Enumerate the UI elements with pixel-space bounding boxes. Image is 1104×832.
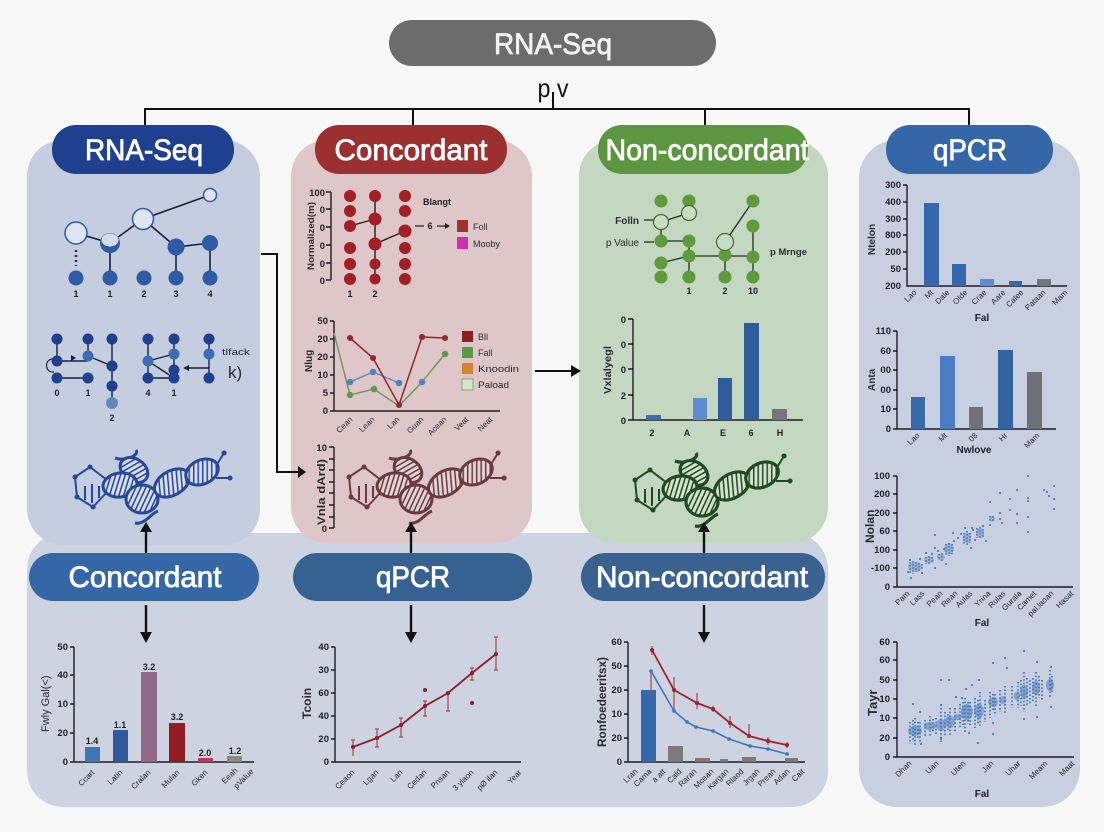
dot plot: normalized: 6	[427, 221, 433, 231]
heading: Non-concordant	[598, 125, 809, 174]
chart axis behind helix: 10	[316, 443, 327, 454]
network diagram: upper: 1	[73, 289, 79, 299]
bar chart: green panel: 0	[621, 365, 626, 376]
heading: RNA-Seq: RNA-Seq	[85, 134, 203, 167]
bar chart: concordant	[40, 642, 256, 791]
panel: Non-concordant	[579, 125, 828, 543]
line chart: qPCR: Cedan	[405, 768, 428, 791]
dot plot: normalized: Blangt	[423, 197, 451, 207]
line chart: qPCR: Lgan	[361, 768, 380, 787]
scatter plot: upper: 100	[874, 471, 890, 482]
title	[389, 20, 716, 66]
scatter plot: upper: pal.laoan	[1026, 589, 1055, 618]
network diagram: green: p Mrnge	[770, 247, 807, 258]
bar chart: concordant: Latin	[106, 768, 124, 787]
bar chart: green panel: 0	[621, 416, 626, 427]
combo chart: non-concordant	[595, 637, 807, 792]
icon: DNA helix green	[635, 453, 790, 526]
scatter plot: upper: Hasat	[1054, 589, 1076, 610]
heading: Concordant: Concordant	[68, 561, 222, 594]
line chart: multi-series: 50	[317, 316, 328, 327]
icon: DNA helix blue	[75, 450, 230, 523]
line chart: qPCR: 40	[318, 711, 329, 722]
line chart: qPCR: Pnsan	[429, 768, 451, 790]
bar chart: concordant: 1.1	[114, 720, 126, 730]
scatter plot: lower: Uhar	[1004, 759, 1023, 778]
bar chart: qPCR top: Olde	[951, 288, 970, 306]
combo chart: non-concordant: 10	[611, 709, 622, 720]
scatter plot: lower: Uan	[924, 759, 940, 776]
line chart: multi-series: 10	[317, 370, 328, 381]
heading: Concordant	[315, 125, 507, 174]
icon: DNA helix brown	[349, 450, 504, 523]
bar chart: qPCR top: 400	[885, 197, 901, 208]
scatter plot: upper: 100	[874, 545, 890, 556]
combo chart: non-concordant: Mcean	[692, 767, 715, 790]
bar chart: green panel	[602, 315, 803, 438]
scatter plot: lower: Meam	[1027, 759, 1050, 781]
bar chart: green panel: 6	[748, 428, 754, 438]
bar chart: qPCR second: Hr	[997, 431, 1010, 443]
dot plot: normalized: 0	[320, 205, 325, 216]
combo chart: non-concordant: Raran	[677, 767, 698, 789]
line chart: qPCR: 40	[318, 642, 329, 653]
network diagram: upper: 1	[107, 289, 113, 299]
bar chart: qPCR second: Anta	[867, 368, 878, 391]
panel: bottom validation band	[27, 533, 828, 807]
bar chart: qPCR second: Lao	[906, 431, 922, 447]
line chart: multi-series: Bll	[478, 332, 488, 342]
combo chart: non-concordant: 20	[611, 733, 622, 744]
bar chart: qPCR top: Fal	[975, 313, 989, 324]
combo chart: non-concordant: Cait	[790, 767, 807, 783]
bar chart: concordant: 50	[57, 642, 68, 653]
heading: qPCR: qPCR	[933, 134, 1007, 167]
bar chart: concordant: Fwly Gal(<)	[40, 675, 52, 732]
chart axis behind helix	[316, 443, 334, 535]
combo chart: non-concordant: Prean	[756, 767, 777, 789]
bar chart: green panel: 0	[621, 340, 626, 351]
scatter plot: upper: Rulas	[987, 589, 1007, 610]
scatter plot: upper: -100	[871, 563, 890, 574]
network diagram: green: 2	[722, 286, 728, 296]
dot plot: normalized: 2	[372, 289, 378, 299]
combo chart: non-concordant: Ronfoedeeritsx)	[595, 657, 609, 747]
line chart: multi-series: Guan	[405, 415, 425, 435]
combo chart: non-concordant: 0	[617, 757, 622, 768]
line chart: multi-series: Lean	[357, 415, 376, 434]
combo chart: non-concordant: Cald	[665, 767, 683, 785]
line chart: qPCR: 20	[318, 734, 329, 745]
bar chart: qPCR second: 60	[880, 346, 891, 357]
bar chart: qPCR second: 0	[886, 424, 891, 435]
dot plot: normalized: 0	[320, 259, 325, 270]
heading: Concordant	[29, 553, 259, 601]
scatter plot: lower: Jan	[980, 759, 995, 775]
bar chart: qPCR top: 50	[890, 264, 901, 275]
bar chart: qPCR top: Aare	[989, 288, 1008, 306]
scatter plot: upper: Aulas	[954, 589, 974, 610]
bar chart: qPCR second: 10	[880, 404, 891, 415]
bar chart: concordant: 1.2	[229, 746, 241, 756]
line chart: multi-series: Paload	[478, 380, 509, 390]
heading: qPCR	[886, 125, 1053, 174]
network diagram: green	[606, 194, 807, 296]
bar chart: concordant: Ccart	[77, 768, 97, 788]
heading: qPCR	[293, 553, 532, 601]
line chart: multi-series: Lan	[386, 415, 401, 431]
bar chart: qPCR top: 800	[885, 230, 901, 241]
scatter plot: upper: Gurala	[1000, 589, 1024, 612]
line chart: qPCR	[300, 637, 524, 793]
bar chart: qPCR top: Lao	[903, 288, 919, 304]
scatter plot: lower: 50	[879, 675, 890, 686]
scatter plot: upper: Rean	[940, 589, 959, 609]
dot plot: normalized: 1	[347, 289, 353, 299]
scatter plot: lower: 60	[879, 655, 890, 666]
bar chart: green panel: E	[720, 428, 726, 438]
arrow: RNA-Seq to Concordant	[261, 254, 306, 478]
bar chart: concordant: Cralan	[129, 768, 152, 791]
bar chart: qPCR second: Mam	[1022, 431, 1042, 450]
network diagram: lower: 2	[109, 413, 115, 423]
arrow: Concordant to Non-concordant	[535, 365, 581, 377]
bar chart: qPCR top: Ntelon	[867, 224, 878, 255]
line chart: qPCR: 3 ylaon	[451, 768, 475, 793]
scatter plot: lower: Tayr	[865, 690, 880, 716]
panel: Concordant	[291, 125, 532, 543]
heading: Non-concordant: Non-concordant	[596, 561, 809, 594]
bar chart: qPCR second: 08	[967, 431, 980, 444]
combo chart: non-concordant: Cama	[632, 767, 654, 789]
dot plot: normalized: 0	[320, 276, 325, 287]
line chart: qPCR: Lan	[389, 768, 404, 784]
heading: Non-concordant	[581, 553, 825, 601]
bar chart: qPCR second: Mt	[937, 431, 950, 444]
combo chart: non-concordant: 20	[611, 685, 622, 696]
arrow: Non-concordant down to chart	[698, 605, 710, 643]
bar chart: qPCR top: 300	[885, 214, 901, 225]
chart axis behind helix: 0	[322, 524, 327, 535]
label: p v: p v	[538, 73, 568, 103]
bar chart: concordant: 1.4	[86, 736, 98, 746]
scatter plot: lower: 20	[879, 733, 890, 744]
bar chart: concordant: Gken	[190, 768, 209, 788]
scatter plot: upper	[863, 471, 1076, 629]
line chart: multi-series: Veat	[453, 415, 471, 433]
bar chart: qPCR top: 200	[885, 247, 901, 258]
dot plot: normalized: Mooby	[473, 239, 501, 249]
bar chart: qPCR top: Pataan	[1023, 288, 1047, 312]
network diagram: green: p Value	[606, 238, 639, 249]
network diagram: green: 1	[686, 286, 692, 296]
dot plot: normalized: 0	[320, 241, 325, 252]
title: RNA-Seq	[494, 28, 612, 61]
panel: qPCR	[859, 125, 1080, 807]
bar chart: qPCR top	[867, 180, 1070, 324]
scatter plot: upper: Pam	[893, 589, 912, 607]
line chart: multi-series: 5	[323, 388, 329, 399]
scatter plot: upper: 60	[879, 526, 890, 537]
bar chart: concordant: 0	[63, 757, 68, 768]
heading: RNA-Seq	[52, 125, 234, 174]
network diagram: upper: 2	[141, 289, 147, 299]
line chart: qPCR: Year	[506, 768, 524, 786]
scatter plot: lower: Dhan	[894, 759, 913, 779]
bar chart: green panel: 2	[649, 428, 655, 438]
heading: Non-concordant: Non-concordant	[606, 134, 809, 167]
line chart: multi-series: 20	[317, 334, 328, 345]
network diagram: green: Folln	[615, 216, 639, 227]
bar chart: qPCR top: Mam	[1050, 288, 1070, 307]
bar chart: qPCR second: 110	[876, 326, 891, 337]
line chart: qPCR: Tcoin	[300, 688, 314, 719]
scatter plot: upper: 200	[874, 508, 890, 519]
bar chart: green panel: A	[684, 428, 691, 438]
line chart: qPCR: 30	[318, 665, 329, 676]
combo chart: non-concordant: Kargan	[706, 767, 730, 792]
heading: Concordant: Concordant	[334, 134, 488, 167]
bar chart: concordant: 2.0	[199, 748, 211, 758]
line chart: multi-series: Nlug	[304, 350, 315, 372]
connector: top tree	[145, 92, 969, 125]
bar chart: green panel: H	[777, 428, 783, 438]
combo chart: non-concordant: Lran	[622, 767, 639, 785]
line chart: multi-series: Fall	[478, 348, 493, 358]
combo chart: non-concordant: 60	[611, 637, 622, 648]
bar chart: concordant: 3.2	[143, 662, 155, 672]
line chart: multi-series: Cean	[335, 415, 354, 435]
scatter plot: lower: 0	[885, 752, 890, 763]
network diagram: lower	[46, 334, 251, 423]
network diagram: lower: 0	[54, 388, 60, 398]
arrow: Non-concordant up to green panel	[698, 522, 710, 553]
scatter plot: upper: Nolan	[863, 510, 877, 543]
scatter plot: lower: Fal	[975, 789, 989, 800]
scatter plot: lower	[865, 637, 1077, 800]
bar chart: qPCR second	[867, 326, 1056, 456]
dot plot: normalized: Normalized(m)	[306, 202, 317, 270]
scatter plot: upper: Fal	[975, 618, 989, 629]
bar chart: concordant: 40	[57, 670, 68, 681]
scatter plot: lower: 10	[879, 713, 890, 724]
bar chart: green panel: 0	[621, 315, 626, 326]
scatter plot: upper: Yrina	[973, 589, 993, 609]
network diagram: lower: tlfack	[222, 347, 251, 357]
line chart: qPCR: pØ ilan	[475, 768, 499, 792]
bar chart: qPCR second: 00	[880, 385, 891, 396]
dot plot: normalized: 100	[309, 188, 325, 199]
bar chart: concordant: Mulan	[160, 768, 181, 790]
scatter plot: lower: 10	[879, 694, 890, 705]
bar chart: concordant: 3.2	[171, 712, 183, 722]
combo chart: non-concordant: Adan	[772, 767, 791, 787]
bar chart: concordant: 10	[57, 699, 68, 710]
scatter plot: upper: Pean	[925, 589, 944, 609]
line chart: multi-series: Knoodin	[478, 364, 519, 374]
network diagram: lower: 1	[85, 388, 91, 398]
combo chart: non-concordant: Rlaod	[724, 767, 745, 788]
heading: qPCR: qPCR	[376, 561, 450, 594]
bar chart: qPCR top: Crae	[970, 288, 989, 307]
line chart: qPCR: 60	[318, 688, 329, 699]
arrow: Concordant down to chart	[140, 605, 152, 643]
arrow: qPCR down to chart	[405, 605, 417, 643]
network diagram: lower: k)	[228, 363, 242, 382]
scatter plot: upper: 0	[885, 582, 890, 593]
bar chart: qPCR top: Calee	[1004, 288, 1026, 309]
bar chart: green panel: 2	[621, 391, 626, 402]
network diagram: upper: 4	[207, 289, 213, 299]
bar chart: concordant: pValue	[232, 767, 256, 791]
line chart: multi-series: Acean	[426, 415, 448, 437]
dot plot: normalized	[306, 188, 501, 299]
bar chart: qPCR top: 300	[885, 180, 901, 191]
dot plot: normalized: 0	[320, 223, 325, 234]
bar chart: qPCR top: 200	[885, 281, 901, 292]
panel: RNA-Seq	[27, 125, 260, 545]
combo chart: non-concordant: Jrgan	[741, 767, 761, 788]
scatter plot: upper: 200	[874, 489, 890, 500]
network diagram: lower: 1	[171, 388, 177, 398]
line chart: multi-series: 20	[317, 352, 328, 363]
bar chart: concordant: 20	[57, 728, 68, 739]
combo chart: non-concordant: 50	[611, 661, 622, 672]
network diagram: upper: 3	[173, 289, 179, 299]
dot plot: normalized: Foll	[473, 222, 488, 232]
bar chart: concordant: Eeah	[220, 766, 239, 786]
bar chart: qPCR second: Nwlove	[956, 445, 992, 456]
bar chart: qPCR top: Dale	[933, 288, 952, 306]
arrow: Concordant up to RNA-Seq panel	[140, 522, 152, 553]
chart axis behind helix: Vnla dArd)	[316, 459, 328, 525]
scatter plot: lower: Maat	[1057, 759, 1077, 778]
scatter plot: lower: Uten	[949, 759, 967, 777]
arrow: qPCR up to Concordant panel	[405, 522, 417, 553]
scatter plot: upper: Camet	[1015, 589, 1039, 612]
network diagram: lower: 4	[145, 388, 151, 398]
bar chart: qPCR second: 00	[880, 365, 891, 376]
bar chart: qPCR top: Mt	[923, 288, 936, 301]
line chart: qPCR: Ceaon	[333, 768, 356, 791]
scatter plot: lower: 60	[879, 637, 890, 648]
line chart: multi-series	[304, 316, 519, 437]
line chart: qPCR: 0	[324, 757, 329, 768]
line chart: multi-series: 0	[323, 406, 328, 417]
network diagram: upper	[65, 188, 218, 299]
scatter plot: upper: Lass	[908, 589, 926, 607]
network diagram: green: 10	[748, 286, 758, 296]
combo chart: non-concordant: a att	[650, 767, 668, 784]
line chart: multi-series: Neat	[476, 415, 495, 433]
bar chart: green panel: Vxlalyegl	[602, 346, 614, 394]
